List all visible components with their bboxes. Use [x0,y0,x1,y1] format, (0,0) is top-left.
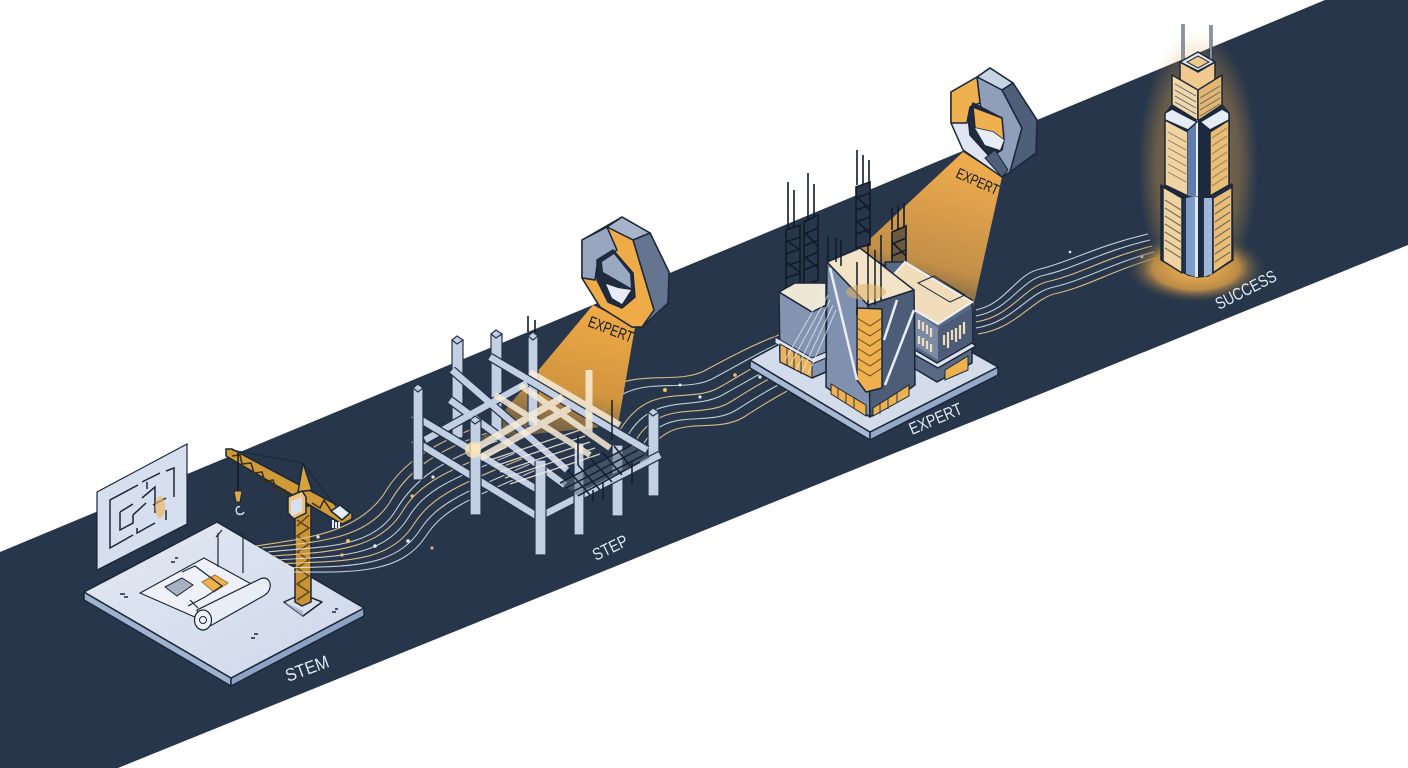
stage 2: expert octagon icon [582,217,669,327]
beams [413,357,660,518]
stage 3: city block [750,150,998,440]
stage 1: foundation [84,444,364,686]
rebar mesh deck [560,400,650,502]
center tower [826,235,915,417]
front columns [413,384,584,555]
stage 4: success skyscraper [1124,24,1268,304]
stage 2: beam label: EXPERT [586,314,636,347]
flow lines: stage 1 to stage 2 [256,430,536,572]
label: STEM: STEM [283,652,332,686]
light rays [785,290,836,374]
stage 2: expert spotlight beam [480,305,635,440]
middle tier [1165,105,1229,200]
blueprint roll [140,530,270,630]
stage 3: expert spotlight beam [858,152,1002,312]
light-washed glowing girders [473,370,620,484]
label: STEP: STEP [589,531,631,565]
stage 3: expert octagon icon [951,68,1037,177]
rebar towers [786,150,906,290]
antennas [1183,24,1211,64]
tower crane [226,449,352,616]
platform [750,295,998,440]
top tiers [1172,52,1222,121]
stage 2: steel frame [413,316,660,555]
lower tier [1161,184,1233,277]
glow [1124,30,1268,304]
right low building [880,262,976,382]
label: EXPERT: EXPERT [906,399,965,439]
concrete platform [84,522,364,686]
left building [775,283,826,378]
blueprint wall panel [97,444,187,570]
stage 3: beam label: EXPERT [953,165,1001,199]
label: SUCCESS: SUCCESS [1212,267,1280,314]
flow lines: stage 3 to stage 4 [976,234,1156,334]
flow lines: stage 2 to stage 3 [590,333,820,447]
back columns [452,316,659,516]
